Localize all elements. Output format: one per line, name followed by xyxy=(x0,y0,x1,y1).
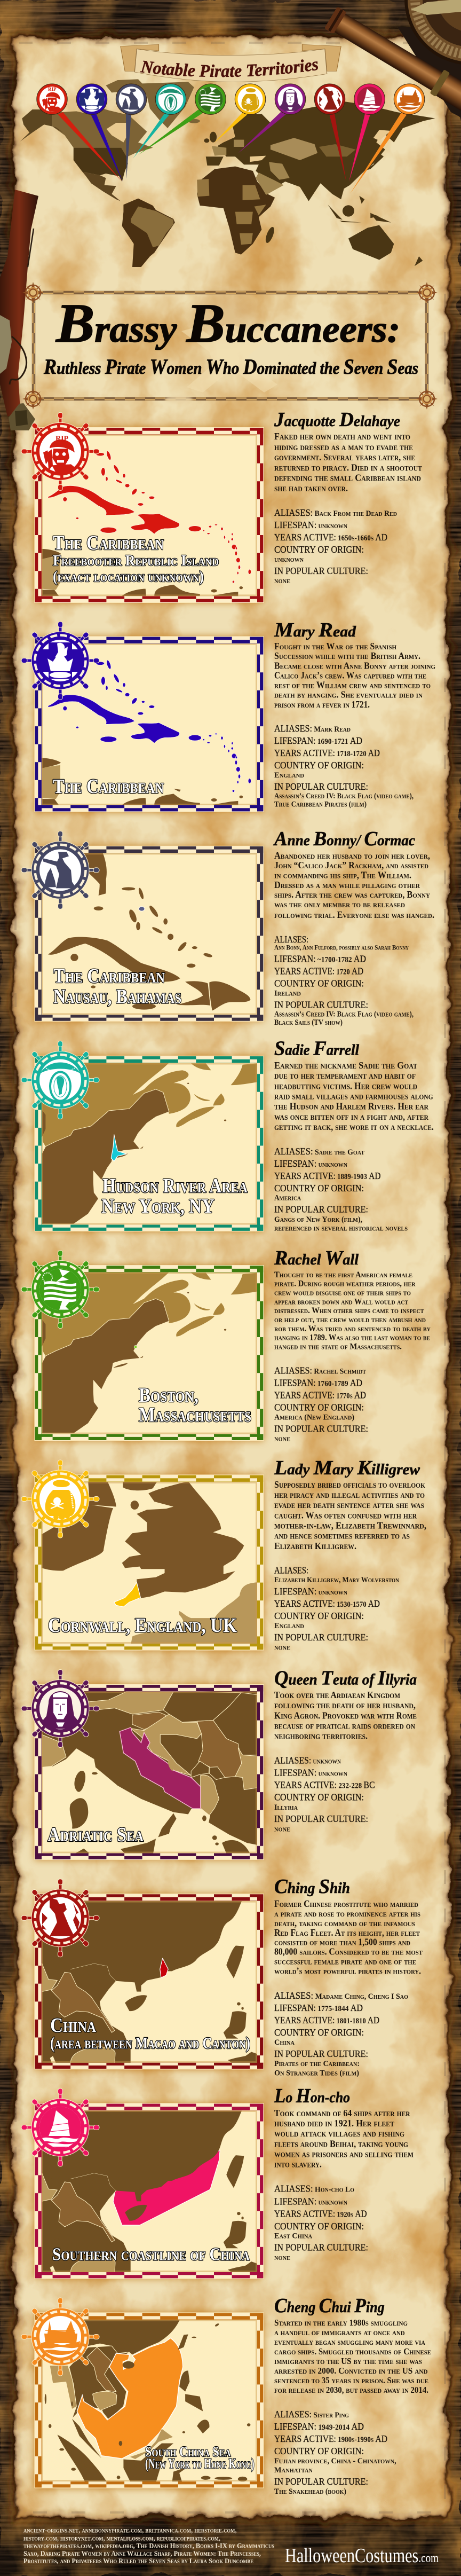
map label xyxy=(53,532,219,585)
text: Cheng Chui Ping: Fujian province, China - Chinatown, xyxy=(274,2457,396,2465)
text: Rachel Wall: YEARS ACTIVE: 1770s AD xyxy=(274,1389,366,1400)
title frame with compass corners xyxy=(22,282,438,410)
text: Ching Shih: a pirate and rose to prominence after his xyxy=(274,1908,420,1919)
text: Anne Bonny: ships. After the crew was captured, Bonny xyxy=(274,889,430,900)
panel 6: Lady Mary Killigrew map xyxy=(21,1460,264,1651)
text: Anne Bonny: Ann Bonn, Ann Fulford, possibly also Sarah Bonny xyxy=(274,944,409,952)
text: Sadie Farrell: COUNTRY OF ORIGIN: xyxy=(274,1183,364,1193)
text: Rachel Wall: COUNTRY OF ORIGIN: xyxy=(274,1402,364,1412)
text: Ching Shih: consisted of more than 1,500 ships and xyxy=(274,1937,410,1947)
text: Ching Shih xyxy=(274,1875,423,2077)
text: Mary Read: ALIASES: Mark Read xyxy=(274,723,351,734)
pin: 5 Boston green xyxy=(138,84,226,155)
pin: 8 China dark red xyxy=(314,84,346,182)
top right wood corner xyxy=(398,27,461,117)
text: Lady Mary Killigrew: YEARS ACTIVE: 1530-1570 AD xyxy=(274,1598,380,1609)
text: Sadie Farrell xyxy=(274,1037,434,1233)
text: Cheng Chui Ping: eventually began smuggling many more via xyxy=(274,2337,425,2347)
map label: Cornwall, England, UK xyxy=(48,1614,237,1637)
text: Rachel Wall: America (New England) xyxy=(274,1413,354,1422)
text: Anne Bonny: Ireland xyxy=(274,989,301,998)
text: Mary Read: prison from a fever in 1721. xyxy=(274,699,370,710)
text: Jacquotte Delahaye: unknown xyxy=(274,555,304,564)
text: Lo Hon-cho: ALIASES: Hon-cho Lo xyxy=(274,2184,354,2194)
panel 4: Sadie Farrell map xyxy=(21,1041,264,1231)
text: Sadie Farrell: was once bitten off in a fight and, after xyxy=(274,1111,429,1122)
text: Sadie Farrell: Sadie Farrell xyxy=(274,1037,359,1059)
text: Mary Read: Fought in the War of the Spanish xyxy=(274,641,397,651)
wheel icon: woman with sword xyxy=(21,1879,99,1957)
text: Rachel Wall: distressed. When other ships came to inspect xyxy=(274,1306,424,1315)
text: Queen Teuta: LIFESPAN: unknown xyxy=(274,1768,347,1778)
text: Mary Read: Succession while with the British Army. xyxy=(274,650,420,661)
text: Queen Teuta: COUNTRY OF ORIGIN: xyxy=(274,1792,364,1803)
wheel icon: RIP skull xyxy=(21,412,99,490)
sources footer xyxy=(23,2526,274,2565)
text: Queen Teuta: IN POPULAR CULTURE: xyxy=(274,1813,368,1824)
map label: Hudson River Area xyxy=(102,1175,248,1197)
text: Cheng Chui Ping: Manhattan xyxy=(274,2466,313,2475)
text: Jacquotte Delahaye: IN POPULAR CULTURE: xyxy=(274,566,368,576)
wheel icon: queen portrait xyxy=(21,1669,99,1747)
subtitle: Ruthless Pirate Women Who Dominated the Seven Seas xyxy=(43,355,418,379)
text: Mary Read: True Caribbean Pirates (film) xyxy=(274,800,367,809)
text: Anne Bonny: YEARS ACTIVE: 1720 AD xyxy=(274,965,363,976)
text: Ching Shih: LIFESPAN: 1775-1844 AD xyxy=(274,2002,363,2013)
map label: Adriatic Sea xyxy=(47,1824,144,1846)
text: Lady Mary Killigrew: ALIASES: xyxy=(274,1565,308,1576)
text: Mary Read: COUNTRY OF ORIGIN: xyxy=(274,760,364,771)
text: Queen Teuta: King Agron. Provoked war with Rome xyxy=(274,1710,417,1721)
text: Jacquotte Delahaye: she had taken over. xyxy=(274,483,348,493)
wheel icon: treasure bag xyxy=(21,1460,99,1538)
telescope xyxy=(324,6,461,122)
text: Cheng Chui Ping: ALIASES: Sister Ping xyxy=(274,2409,349,2420)
text: Rachel Wall: Rachel Wall xyxy=(274,1247,359,1269)
map label: Southern coastline of China xyxy=(52,2245,250,2264)
text: Rachel Wall: rob them. Was tried and sentenced to death by xyxy=(274,1324,431,1333)
map label: (area between Macao and Canton) xyxy=(50,2033,250,2052)
text: Jacquotte Delahaye: none xyxy=(274,577,290,585)
text: Anne Bonny xyxy=(273,828,434,1027)
wheel icon: lion and crown xyxy=(21,622,99,700)
text: Rachel Wall: hanging in 1789. Was also the last woman to be xyxy=(274,1333,430,1342)
text: Lo Hon-cho: husband died in 1921. Her fleet xyxy=(274,2118,394,2129)
text: Mary Read: LIFESPAN: 1690-1721 AD xyxy=(274,735,362,746)
text: Rachel Wall: Thought to be the first American female xyxy=(274,1270,412,1279)
scroll banner: Notable Pirate Territories: Notable Pirate Territories xyxy=(140,59,318,77)
text: Cheng Chui Ping: COUNTRY OF ORIGIN: xyxy=(274,2446,364,2456)
text: Sadie Farrell: raid small villages and farmhouses along xyxy=(274,1091,433,1102)
text: Lo Hon-cho: fleets around Beihai, taking young xyxy=(274,2138,408,2149)
text: Anne Bonny: in commanding his ship, The William. xyxy=(274,870,411,881)
text: Anne Bonny: following trial. Everyone else was hanged. xyxy=(274,909,434,920)
text: Jacquotte Delahaye: defending the small Caribbean island xyxy=(274,473,421,483)
map label xyxy=(101,1175,248,1218)
text: Jacquotte Delahaye: government. Several years later, she xyxy=(274,452,415,462)
map label: Freebooter Republic Island xyxy=(53,552,219,569)
text: Queen Teuta: ALIASES: unknown xyxy=(274,1755,341,1766)
text: Sadie Farrell: America xyxy=(274,1194,301,1203)
text: Lo Hon-cho: into slavery. xyxy=(274,2159,322,2170)
panel 2: Mary Read map xyxy=(21,622,264,812)
map label xyxy=(139,1384,251,1426)
panel 7: Queen Teuta map xyxy=(21,1669,264,1860)
compass xyxy=(404,0,461,65)
map label: South China Sea xyxy=(145,2444,231,2460)
text: Sadie Farrell: getting it back, she wore it on a necklace. xyxy=(274,1121,434,1132)
text: Lady Mary Killigrew: evade her death sentence after she was xyxy=(274,1499,424,1510)
text: Queen Teuta: none xyxy=(274,1825,290,1834)
text: Lady Mary Killigrew: caught. Was often confused with her xyxy=(274,1510,417,1520)
text: Queen Teuta: Took over the Ardiaean Kingdom xyxy=(274,1690,400,1700)
pin: 3 Bahamas slate xyxy=(116,84,147,179)
text: Sadie Farrell: headbutting victims. Her crew would xyxy=(274,1081,417,1091)
text: Queen Teuta: Illyria xyxy=(274,1803,298,1812)
text: Lo Hon-cho: YEARS ACTIVE: 1920s AD xyxy=(274,2209,367,2219)
text: Queen Teuta xyxy=(274,1667,417,1834)
title: Brassy Buccaneers: xyxy=(55,293,400,354)
wheel icon: woman with ship xyxy=(21,831,99,909)
text: Jacquotte Delahaye: returned to piracy. Died in a shootout xyxy=(274,462,422,473)
text: Rachel Wall xyxy=(274,1247,431,1443)
logo: HalloweenCostumes.com: HalloweenCostumes.com xyxy=(285,2544,439,2567)
text: Anne Bonny: Black Sails (TV show) xyxy=(274,1018,343,1027)
text: Cheng Chui Ping: LIFESPAN: 1949-2014 AD xyxy=(274,2421,364,2432)
text: Cheng Chui Ping: YEARS ACTIVE: 1980s-1990s AD xyxy=(274,2433,387,2444)
panel 10: Cheng Chui Ping map xyxy=(21,2298,264,2488)
map label xyxy=(145,2444,255,2472)
text: Lo Hon-cho xyxy=(274,2085,414,2262)
pin: 1 Caribbean red xyxy=(37,84,122,182)
text: Jacquotte Delahaye: Faked her own death and went into xyxy=(274,431,410,442)
text: Ching Shih: 80,000 sailors. Considered to be the most xyxy=(274,1946,423,1957)
text: Mary Read: England xyxy=(274,771,304,780)
text: Mary Read: death by hanging. She eventually died in xyxy=(274,689,423,700)
map label xyxy=(50,2014,250,2052)
text: Mary Read: Assassin’s Creed IV: Black Flag (video game), xyxy=(274,792,414,800)
text: Mary Read: YEARS ACTIVE: 1718-1720 AD xyxy=(274,748,380,758)
wheel icon: ear necklace xyxy=(21,1041,99,1119)
text: Queen Teuta: neighboring territories. xyxy=(274,1731,368,1741)
text: Anne Bonny: John “Calico Jack” Rackham, and assisted xyxy=(274,860,428,870)
text: Anne Bonny: Assassin’s Creed IV: Black Flag (video game), xyxy=(274,1010,414,1019)
sources footer: Saxo, Daring Pirate Women by Anne Wallace Sharp, Pirate Women: The Princesses, xyxy=(23,2549,261,2557)
text: Queen Teuta: because of piratical raids ordered on xyxy=(274,1721,416,1731)
text: Rachel Wall: IN POPULAR CULTURE: xyxy=(274,1424,368,1434)
text: Sadie Farrell: Earned the nickname Sadie the Goat xyxy=(274,1060,417,1071)
text: Lo Hon-cho: LIFESPAN: unknown xyxy=(274,2196,347,2207)
text: Ching Shih: YEARS ACTIVE: 1801-1810 AD xyxy=(274,2015,379,2025)
text: Lady Mary Killigrew: Lady Mary Killigrew xyxy=(274,1457,420,1479)
text: Queen Teuta: YEARS ACTIVE: 232-228 BC xyxy=(274,1779,375,1790)
text: Cheng Chui Ping xyxy=(274,2295,431,2496)
panel 8: Ching Shih map xyxy=(21,1879,264,2069)
text: Anne Bonny: was the only member to be released xyxy=(274,899,405,909)
text: Lo Hon-cho: East China xyxy=(274,2232,312,2240)
text: Rachel Wall: LIFESPAN: 1760-1789 AD xyxy=(274,1377,362,1388)
text: Lady Mary Killigrew: England xyxy=(274,1622,304,1630)
text: Ching Shih: COUNTRY OF ORIGIN: xyxy=(274,2027,364,2038)
text: Anne Bonny: Anne Bonny/ Cormac xyxy=(273,828,416,850)
text: Cheng Chui Ping: cargo ships. Smuggled thousands of Chinese xyxy=(274,2346,431,2357)
text: Sadie Farrell: due to her temperament and habit of xyxy=(274,1070,416,1081)
sources footer: ancient-origins.net, annebonnypirate.com, brittannica.com, herstorie.com, xyxy=(23,2526,237,2534)
map label: The Caribbean xyxy=(53,775,164,798)
text: Rachel Wall: ALIASES: Rachel Schmidt xyxy=(274,1365,367,1376)
map label: Massachusetts xyxy=(139,1404,251,1426)
text: Rachel Wall: none xyxy=(274,1434,290,1443)
text: Rachel Wall: appear broken down and Wall would act xyxy=(274,1297,409,1306)
text: Ching Shih: successful female pirate and one of the xyxy=(274,1956,416,1967)
text: Mary Read: IN POPULAR CULTURE: xyxy=(274,781,368,792)
text: Anne Bonny: Dressed as a man while pillaging other xyxy=(274,879,420,890)
text: Rachel Wall: crew would disguise one of their ships to xyxy=(274,1288,411,1298)
text: Cheng Chui Ping: Cheng Chui Ping xyxy=(274,2295,385,2317)
text: Rachel Wall: pirate. During rough weather periods, her xyxy=(274,1279,416,1289)
text: Sadie Farrell: Gangs of New York (film), xyxy=(274,1215,362,1224)
text: Cheng Chui Ping: sentenced to 35 years in prison. She was due xyxy=(274,2375,428,2385)
text: Cheng Chui Ping: a handful of immigrants at once and xyxy=(274,2327,405,2337)
text: Ching Shih: On Stranger Tides (film) xyxy=(274,2069,359,2077)
panel 3: Anne Bonny map xyxy=(21,831,264,1022)
text: Cheng Chui Ping: The Snakehead (book) xyxy=(274,2487,346,2496)
pin: 7 Adriatic purple xyxy=(238,84,306,153)
text: Ching Shih: death, taking command of the infamous xyxy=(274,1918,415,1928)
text: Jacquotte Delahaye xyxy=(274,409,422,585)
panel 5: Rachel Wall map xyxy=(21,1251,264,1441)
pin: 2 Caribbean blue xyxy=(76,84,123,182)
pin: 4 New York teal xyxy=(133,84,186,159)
text: Mary Read xyxy=(274,619,435,809)
text: Lo Hon-cho: Took command of 64 ships after her xyxy=(274,2108,410,2118)
text: Anne Bonny: COUNTRY OF ORIGIN: xyxy=(274,978,364,988)
text: Lo Hon-cho: none xyxy=(274,2253,290,2262)
map label: (exact location unknown) xyxy=(53,568,204,585)
text: Lady Mary Killigrew: IN POPULAR CULTURE: xyxy=(274,1632,368,1643)
text: Jacquotte Delahaye: LIFESPAN: unknown xyxy=(274,520,347,530)
text: Lo Hon-cho: IN POPULAR CULTURE: xyxy=(274,2242,368,2252)
text: Anne Bonny: IN POPULAR CULTURE: xyxy=(274,1000,368,1010)
text: Mary Read: Mary Read xyxy=(274,619,356,641)
text: Ching Shih: world’s most powerful pirates in history. xyxy=(274,1966,421,1976)
panel 9: Lo Hon-cho map xyxy=(21,2088,264,2279)
pin: 10 South China Sea orange xyxy=(350,84,425,194)
text: Sadie Farrell: IN POPULAR CULTURE: xyxy=(274,1204,368,1215)
text: Lady Mary Killigrew: Elizabeth Killigrew, Mary Wolverston xyxy=(274,1576,399,1584)
text: Anne Bonny: LIFESPAN: ~1700-1782 AD xyxy=(274,953,366,964)
map label: New York, NY xyxy=(101,1195,214,1218)
text: Lady Mary Killigrew: LIFESPAN: unknown xyxy=(274,1586,347,1597)
text: Sadie Farrell: YEARS ACTIVE: 1889-1903 AD xyxy=(274,1171,381,1181)
text: Anne Bonny: Abandoned her husband to join her lover, xyxy=(274,850,430,861)
text: Cheng Chui Ping: immigrants to the US by the time she was xyxy=(274,2356,422,2366)
scroll banner: Notable Pirate Territories xyxy=(120,44,341,82)
text: Lady Mary Killigrew: and hence sometimes referred to as xyxy=(274,1530,410,1541)
text: Jacquotte Delahaye: COUNTRY OF ORIGIN: xyxy=(274,544,364,555)
sources footer: Prostitutes, and Privateers Who Ruled the Seven Seas by Laura Sook Duncombe xyxy=(23,2557,253,2565)
frame glows xyxy=(35,427,264,2488)
sources footer: thewayofthepirates.com, wikipedia.org, The Danish History, Books I-IX by Grammaticus xyxy=(23,2542,274,2550)
text: Lady Mary Killigrew: mother-in-law, Elizabeth Trewinnard, xyxy=(274,1520,426,1531)
text: Lady Mary Killigrew: Elizabeth Killigrew. xyxy=(274,1541,356,1551)
text: Lady Mary Killigrew xyxy=(274,1457,426,1652)
text: Mary Read: rest of the William crew and sentenced to xyxy=(274,680,431,690)
map label: The Caribbean xyxy=(53,965,165,987)
wheel icon: RIP skull: RIP xyxy=(55,435,69,443)
text: Lady Mary Killigrew: Supposedly bribed officials to overlook xyxy=(274,1479,426,1490)
text: Ching Shih: Former Chinese prostitute who married xyxy=(274,1898,418,1909)
pin: 1 Caribbean red: RIP xyxy=(48,87,57,92)
text: Ching Shih: IN POPULAR CULTURE: xyxy=(274,2048,368,2059)
wheel icon: cargo ship xyxy=(21,2298,99,2376)
pin: 9 China pink xyxy=(349,84,385,182)
text: Mary Read: Calico Jack’s crew. Was captured with the xyxy=(274,670,426,680)
text: Lady Mary Killigrew: her piracy and illegal activities and to xyxy=(274,1489,425,1500)
text: Ching Shih: China xyxy=(274,2038,295,2047)
text: Sadie Farrell: the Hudson and Harlem Rivers. Her ear xyxy=(274,1101,429,1112)
text: Ching Shih: Pirates of the Caribbean: xyxy=(274,2060,360,2068)
text: Lo Hon-cho: women as prisoners and selling them xyxy=(274,2149,414,2159)
text: Cheng Chui Ping: Started in the early 1980s smuggling xyxy=(274,2318,408,2328)
map label: The Caribbean xyxy=(53,532,164,554)
text: Jacquotte Delahaye: ALIASES: Back From the Dead Red xyxy=(274,507,397,518)
text: Anne Bonny: ALIASES: xyxy=(274,934,308,945)
map label: Nausau, Bahamas xyxy=(53,986,181,1008)
text: Sadie Farrell: ALIASES: Sadie the Goat xyxy=(274,1146,365,1157)
text: Queen Teuta: following the death of her husband, xyxy=(274,1700,416,1710)
text: Rachel Wall: or help out, the crew would then ambush and xyxy=(274,1315,426,1324)
map label: Boston, xyxy=(139,1384,198,1407)
wheel icon: junk ship xyxy=(21,2088,99,2166)
text: Ching Shih: Red Flag Fleet. At its height, her fleet xyxy=(274,1927,420,1938)
flintlock rifle xyxy=(0,190,38,430)
pin: 6 Cornwall yellow xyxy=(214,84,266,143)
text: Cheng Chui Ping: for release in 2030, but passed away in 2014. xyxy=(274,2385,428,2395)
text: Sadie Farrell: LIFESPAN: unknown xyxy=(274,1158,347,1169)
text: Ching Shih: ALIASES: Madame Ching, Cheng I Sao xyxy=(274,1990,408,2001)
text: Jacquotte Delahaye: hiding dressed as a man to evade the xyxy=(274,442,413,452)
panel 1: Jacquotte Delahaye map xyxy=(21,412,264,603)
sources footer: history.com, historynet.com, mentalfloss.com, republicofpirates.com, xyxy=(23,2534,220,2542)
text: Ching Shih: Ching Shih xyxy=(274,1875,350,1898)
text: Mary Read: Became close with Anne Bonny after joining xyxy=(274,660,435,671)
map label: (New York to Hong Kong) xyxy=(145,2456,255,2472)
text: Rachel Wall: hanged in the state of Massachusetts. xyxy=(274,1342,402,1352)
map label: China xyxy=(50,2014,96,2037)
map label xyxy=(53,965,181,1008)
text: Jacquotte Delahaye: Jacquotte Delahaye xyxy=(274,409,400,431)
text: Lo Hon-cho: would attack villages and fishing xyxy=(274,2128,404,2139)
text: Lo Hon-cho: Lo Hon-cho xyxy=(274,2085,350,2107)
text: Cheng Chui Ping: IN POPULAR CULTURE: xyxy=(274,2476,368,2487)
text: Lady Mary Killigrew: none xyxy=(274,1643,290,1652)
text: Queen Teuta: Queen Teuta of Illyria xyxy=(274,1667,417,1690)
wheel icon: flag xyxy=(21,1251,99,1329)
text: Cheng Chui Ping: arrested in 2000. Convicted in the US and xyxy=(274,2366,428,2376)
text: Sadie Farrell: referenced in several historical novels xyxy=(274,1224,408,1233)
world map xyxy=(20,79,435,267)
text: Lady Mary Killigrew: COUNTRY OF ORIGIN: xyxy=(274,1611,364,1621)
text: Lo Hon-cho: COUNTRY OF ORIGIN: xyxy=(274,2221,364,2232)
text: Jacquotte Delahaye: YEARS ACTIVE: 1650s-1660s AD xyxy=(274,532,387,543)
